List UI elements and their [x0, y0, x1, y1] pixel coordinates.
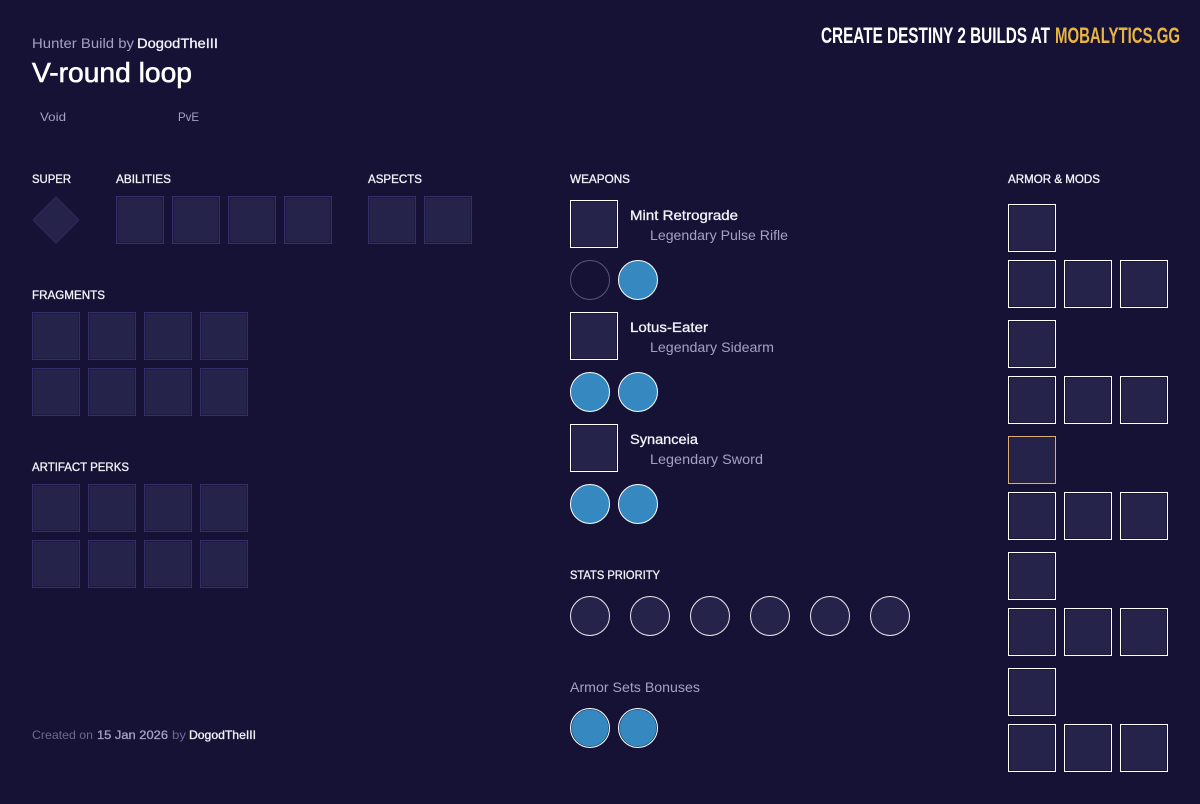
weapon: Mint Retrograde: Mint Retrograde — [630, 207, 738, 223]
panel: armor and mods — [1008, 172, 1168, 772]
armor group: chest with exotic slot — [1008, 436, 1168, 540]
weapon: Lotus-Eater: Lotus-Eater — [630, 319, 708, 335]
panel: stats priority — [570, 568, 910, 636]
heading: stats priority: STATS PRIORITY — [570, 568, 660, 582]
heading: artifact perks: ARTIFACT PERKS — [32, 460, 129, 474]
weapon: Lotus-Eater: Legendary Sidearm — [650, 339, 774, 355]
footer: created-on credit: by — [172, 728, 186, 742]
ability slots — [116, 196, 332, 244]
aspect slots — [368, 196, 472, 244]
weapon: Lotus-Eater — [570, 312, 774, 412]
footer: created-on credit: DogodTheIII — [189, 728, 256, 742]
footer: created-on credit: 15 Jan 2026 — [97, 728, 168, 742]
weapon: Synanceia — [570, 424, 763, 524]
panel: artifact perks — [32, 460, 248, 588]
heading: abilities: ABILITIES — [116, 172, 171, 186]
weapon: Synanceia: Synanceia — [630, 431, 698, 447]
panel: super — [32, 172, 79, 243]
title: V-round loop — [32, 57, 192, 88]
artifact perk slots — [32, 484, 248, 588]
heading: armor and mods: ARMOR & MODS — [1008, 172, 1100, 186]
heading: fragments: FRAGMENTS — [32, 288, 105, 302]
heading: weapons: WEAPONS — [570, 172, 630, 186]
weapon: Mint Retrograde — [570, 200, 788, 300]
heading: aspects: ASPECTS — [368, 172, 422, 186]
armor group: class item — [1008, 668, 1168, 772]
header: build author line: DogodTheIII — [137, 35, 218, 51]
promo banner: CREATE DESTINY 2 BUILDS AT — [821, 23, 1050, 48]
panel: armor sets bonuses — [570, 679, 700, 748]
armor group: arms — [1008, 320, 1168, 424]
armor set icons — [570, 708, 658, 748]
footer: created-on credit: Created on — [32, 728, 93, 742]
weapon: Mint Retrograde: Legendary Pulse Rifle — [650, 227, 788, 243]
panel: abilities — [116, 172, 332, 244]
fragment slots — [32, 312, 248, 416]
weapon: Synanceia: Legendary Sword — [650, 451, 763, 467]
heading: super: SUPER — [32, 172, 71, 186]
armor group: legs — [1008, 552, 1168, 656]
footer: created-on credit — [32, 728, 256, 742]
icon: super diamond — [33, 197, 79, 243]
panel: fragments — [32, 288, 248, 416]
tag: Void: Void — [40, 110, 66, 124]
header: build author line — [32, 35, 218, 51]
heading: armor sets bonuses: Armor Sets Bonuses — [570, 679, 700, 695]
panel: aspects — [368, 172, 472, 244]
stat circles — [570, 596, 910, 636]
header: build author line: Hunter Build by — [32, 35, 134, 51]
panel: weapons — [570, 172, 788, 524]
tag: PvE: PvE — [178, 110, 199, 124]
armor group: helmet — [1008, 204, 1168, 308]
